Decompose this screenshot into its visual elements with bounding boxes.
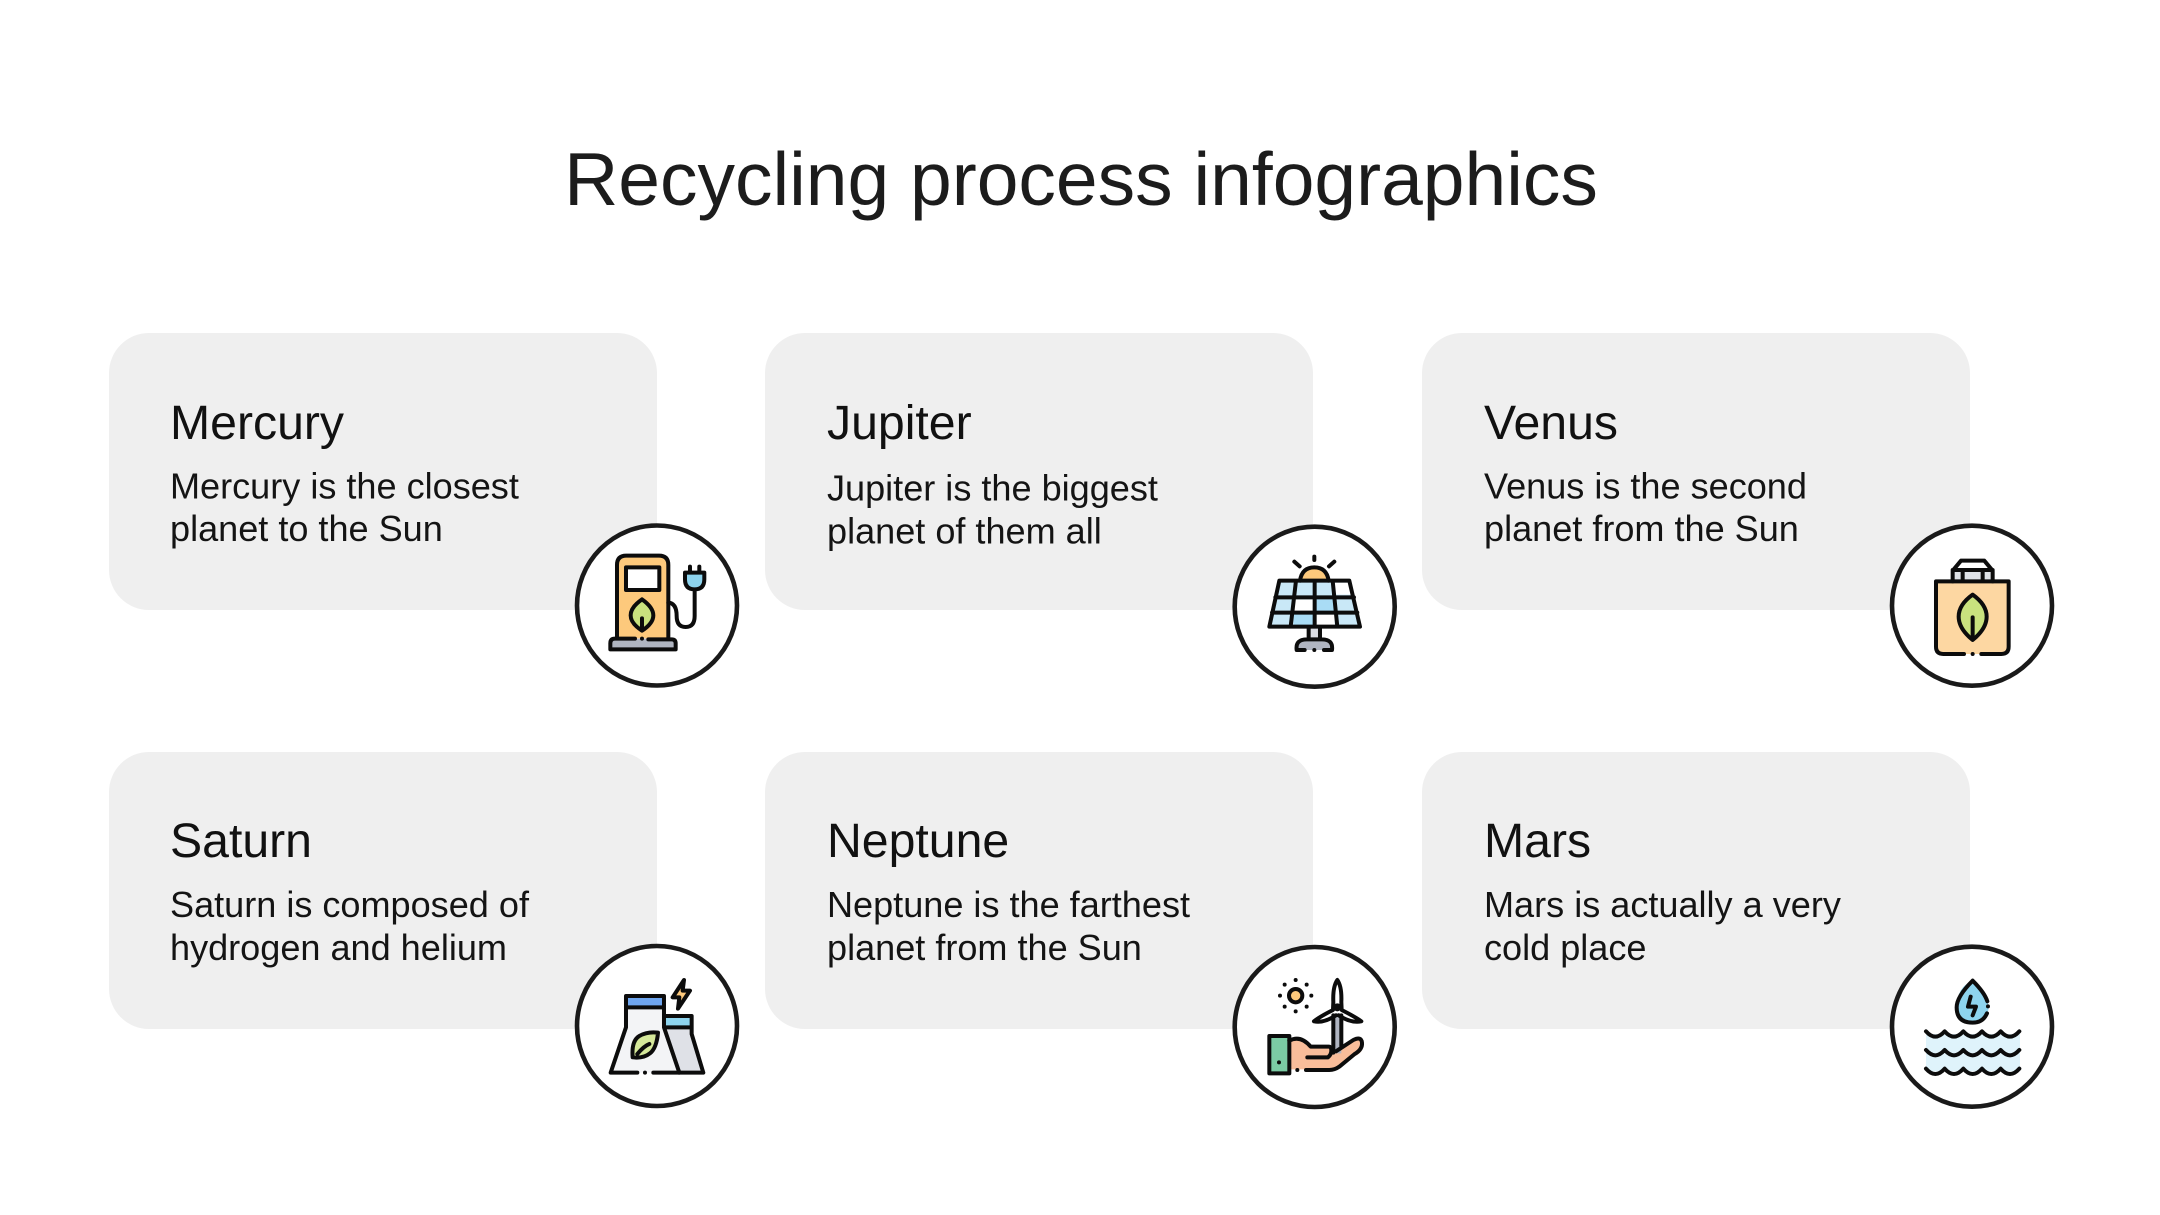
heading: Jupiter: Jupiter <box>827 396 972 450</box>
icon: wind turbine in hand <box>1235 947 1395 1107</box>
panel: Venus <box>1422 333 2052 686</box>
panel: Neptune <box>765 752 1395 1107</box>
text: Venus description: Venus is the second <box>1484 466 1807 506</box>
text: Mars description: cold place <box>1484 927 1646 968</box>
text: Neptune description: planet from the Sun <box>827 927 1142 968</box>
panel: Saturn <box>109 752 737 1106</box>
title: Recycling process infographics <box>564 137 1598 221</box>
heading: Mars: Mars <box>1484 814 1591 868</box>
text: Neptune description: Neptune is the farthest <box>827 884 1190 925</box>
heading: Venus: Venus <box>1484 396 1618 450</box>
icon: recycled bag <box>1892 526 2052 686</box>
text: Saturn description: hydrogen and helium <box>170 927 507 968</box>
heading: Mercury: Mercury <box>170 396 344 450</box>
heading: Neptune: Neptune <box>827 814 1009 868</box>
icon: hydro energy <box>1892 947 2052 1107</box>
text: Mercury description: Mercury is the closest <box>170 466 519 506</box>
panel: Mars <box>1422 752 2052 1107</box>
text: Jupiter description: Jupiter is the biggest <box>827 468 1158 508</box>
text: Saturn description: Saturn is composed of <box>170 884 530 925</box>
icon: green power plant <box>577 946 737 1106</box>
heading: Saturn: Saturn <box>170 814 312 868</box>
icon: EV charging station <box>577 526 737 686</box>
text: Mercury description: planet to the Sun <box>170 508 443 549</box>
text: Venus description: planet from the Sun <box>1484 508 1799 549</box>
text: Jupiter description: planet of them all <box>827 510 1102 552</box>
icon: solar panel <box>1235 527 1395 687</box>
panel: Jupiter <box>765 333 1395 687</box>
text: Mars description: Mars is actually a very <box>1484 884 1841 925</box>
panel: Mercury <box>109 333 737 686</box>
